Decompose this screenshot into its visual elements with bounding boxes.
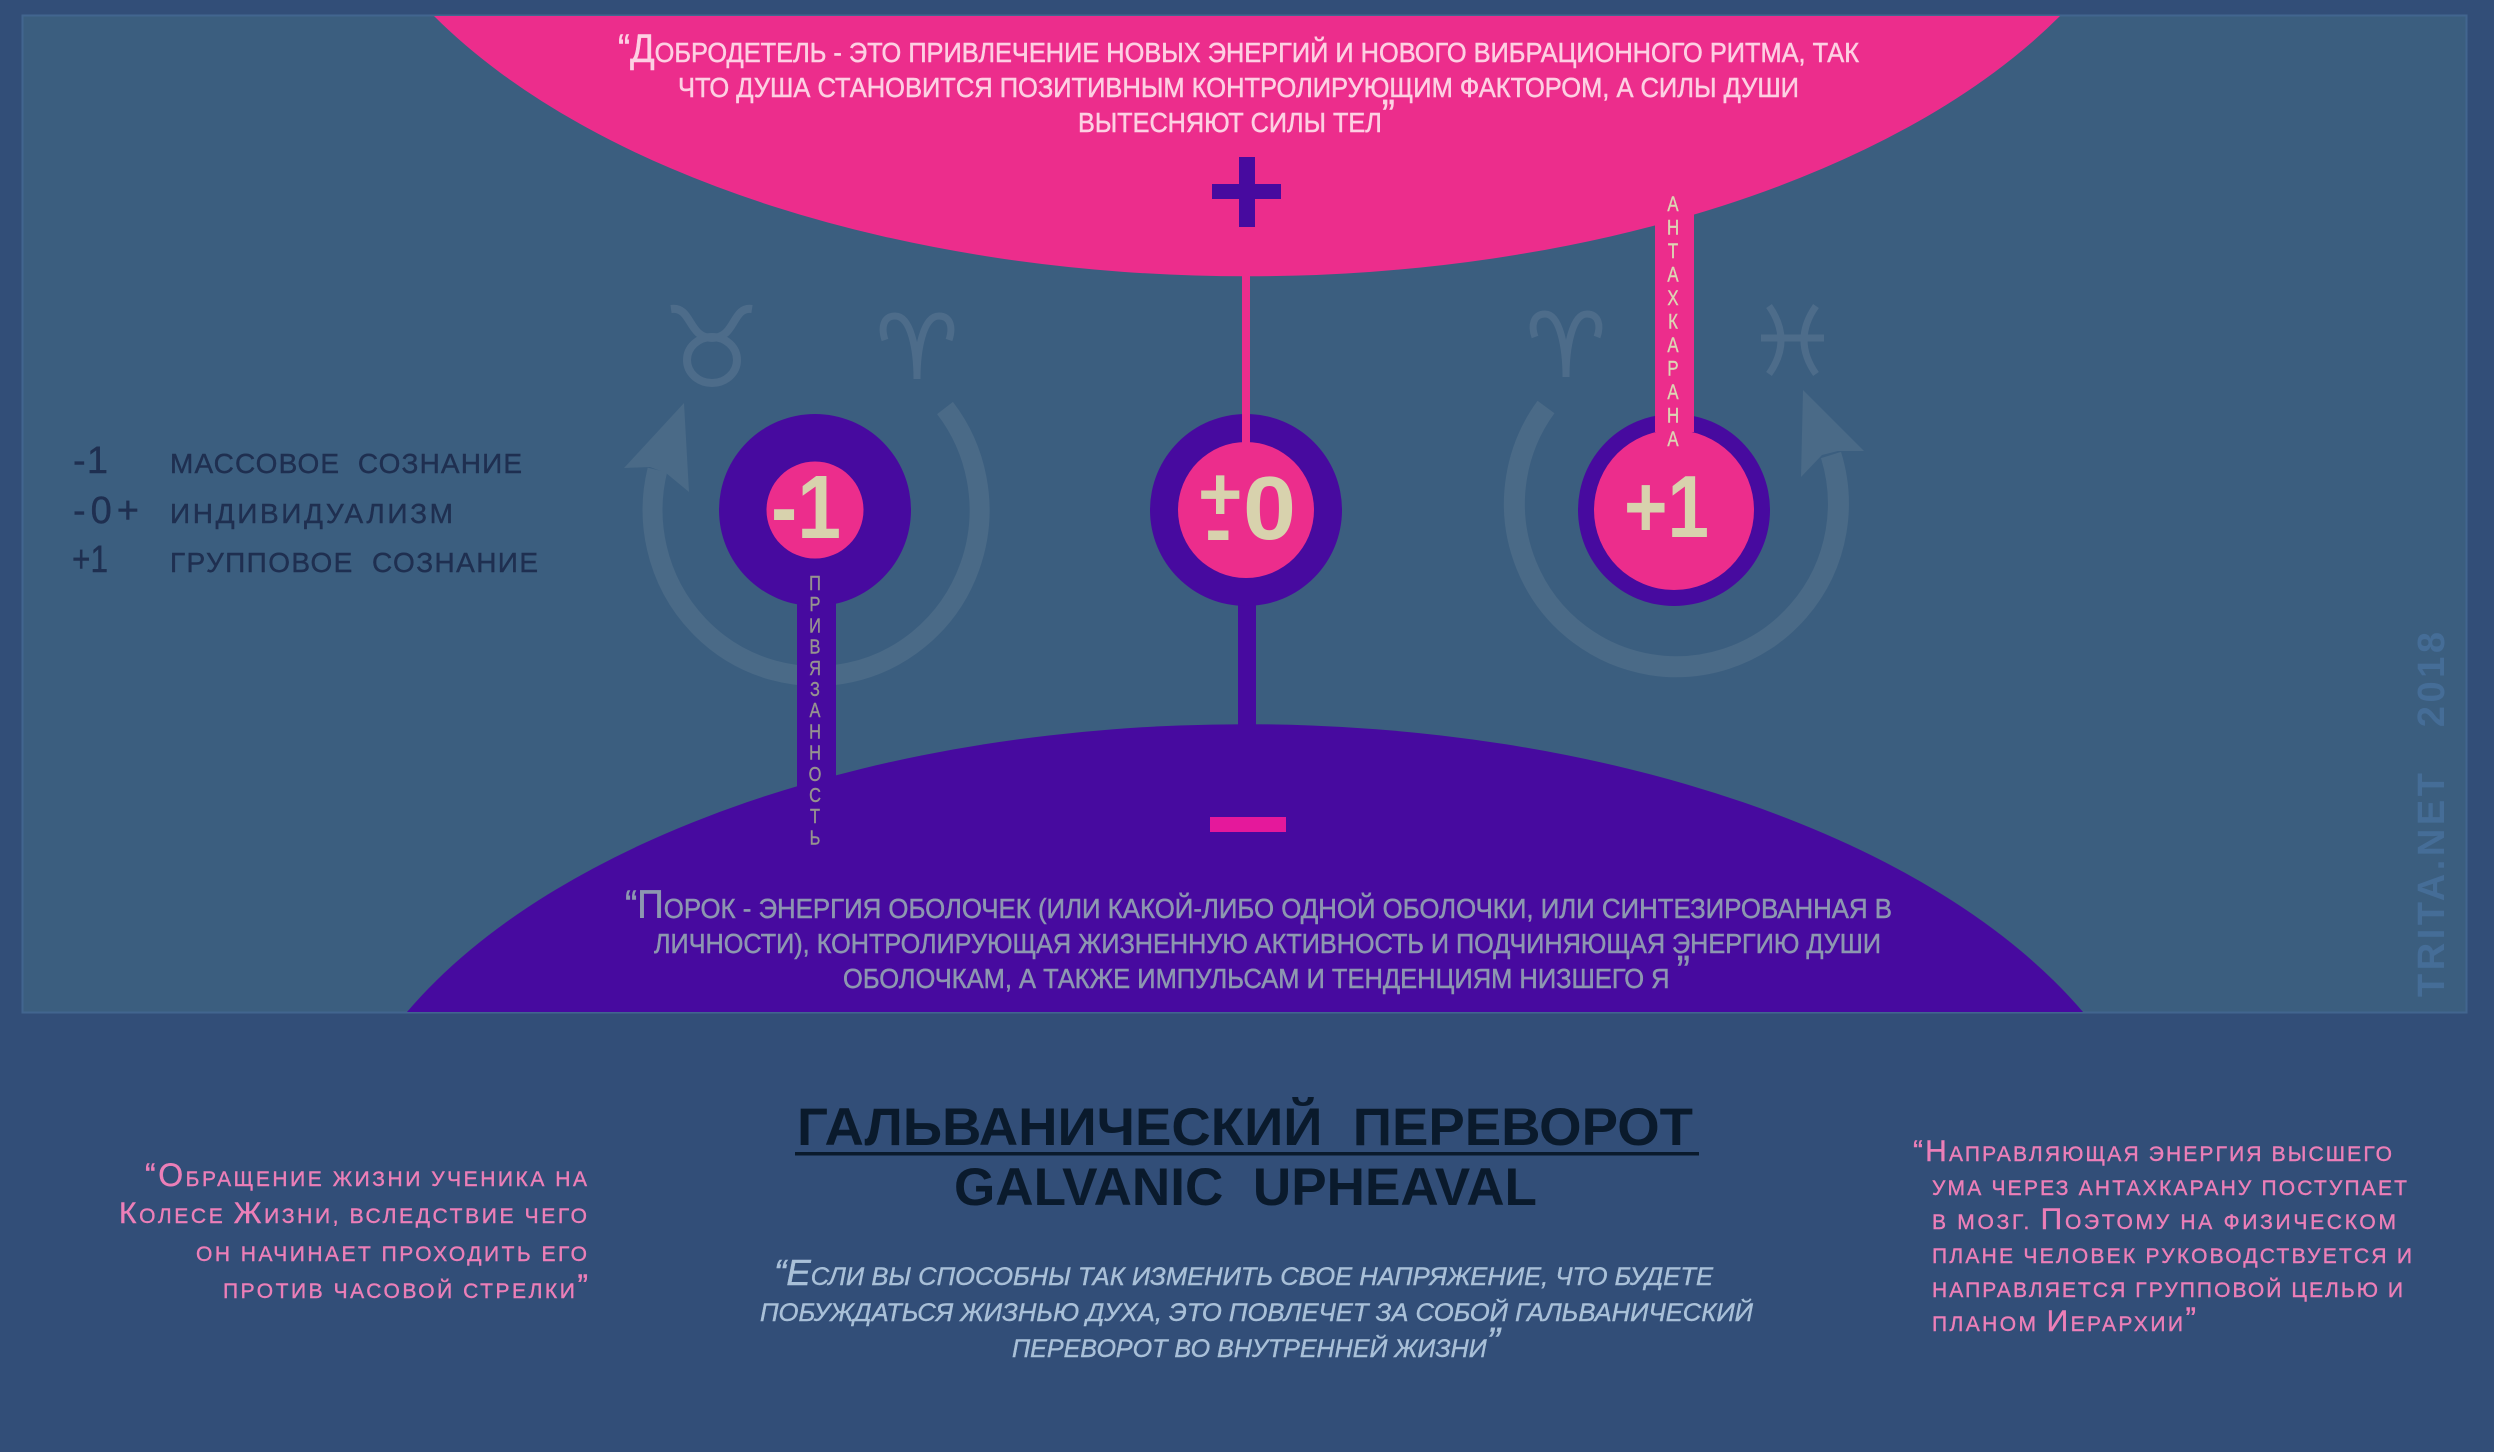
quote: right: “НАПРАВЛЯЮЩАЯ ЭНЕРГИЯ ВЫСШЕГО — [1913, 1135, 2392, 1168]
quote: center: ПОБУЖДАТЬСЯ ЖИЗНЬЮ ДУХА, ЭТО ПОВЛЕЧЕТ ЗА СОБОЙ ГАЛЬВАНИЧЕСКИЙ — [760, 1297, 1753, 1327]
legend — [72, 440, 538, 581]
icon: minus — [1210, 817, 1286, 832]
quote: center: ” — [1487, 1320, 1502, 1364]
quote: vice: ЛИЧНОСТИ), КОНТРОЛИРУЮЩАЯ ЖИЗНЕННУЮ АКТИВНОСТЬ И ПОДЧИНЯЮЩАЯ ЭНЕРГИЮ ДУШИ — [654, 928, 1881, 959]
quote: left: ПРОТИВ ЧАСОВОЙ СТРЕЛКИ — [223, 1280, 575, 1303]
quote: virtue: ” — [1382, 91, 1395, 140]
icon: aries sign left — [883, 316, 951, 379]
quote: virtue — [618, 27, 1860, 140]
quote: center: “ЕСЛИ ВЫ СПОСОБНЫ ТАК ИЗМЕНИТЬ СВОЕ НАПРЯЖЕНИЕ, ЧТО БУДЕТЕ — [774, 1252, 1713, 1293]
quote: center: ПЕРЕВОРОТ ВО ВНУТРЕННЕЙ ЖИЗНИ — [1012, 1335, 1486, 1363]
quote: vice: ” — [1677, 947, 1690, 996]
panel: diagram — [22, 16, 2466, 1012]
arrow: clockwise ring — [1514, 390, 1864, 667]
quote: vice: ОБОЛОЧКАМ, А ТАКЖЕ ИМПУЛЬСАМ И ТЕНДЕНЦИЯМ НИЗШЕГО Я — [843, 963, 1751, 994]
legend: -1 — [73, 440, 108, 482]
bottom purple dome — [407, 724, 2083, 1012]
node: plus-minus zero: 0 — [1243, 459, 1296, 559]
node: minus one: -1 — [771, 458, 841, 558]
quote: right — [1913, 1135, 2412, 1338]
quote: right: НАПРАВЛЯЕТСЯ ГРУППОВОЙ ЦЕЛЬЮ И — [1932, 1278, 2403, 1302]
node: minus one — [719, 414, 911, 795]
legend: ИНДИВИДУАЛИЗМ — [170, 498, 453, 529]
quote: left: “ОБРАЩЕНИЕ ЖИЗНИ УЧЕНИКА НА — [145, 1157, 587, 1193]
quote: right: ПЛАНОМ ИЕРАРХИИ — [1932, 1305, 2183, 1338]
vertical label: antahkarana: АНТАХКАРАНА — [1667, 193, 1679, 452]
title: ГАЛЬВАНИЧЕСКИЙ ПЕРЕВОРОТ — [797, 1096, 1693, 1157]
icon: plus — [1212, 157, 1281, 227]
watermark: TRITA.NET 2018 — [2411, 632, 2453, 997]
legend: МАССОВОЕ СОЗНАНИЕ — [170, 448, 522, 479]
quote: right: В МОЗГ. ПОЭТОМУ НА ФИЗИЧЕСКОМ — [1932, 1203, 2396, 1236]
legend: ГРУППОВОЕ СОЗНАНИЕ — [170, 547, 538, 578]
title — [795, 1096, 1699, 1217]
node: plus-minus zero: + — [1198, 452, 1242, 537]
legend: -0+ — [73, 490, 139, 532]
top pink dome — [434, 16, 2060, 276]
quote: vice — [625, 883, 1892, 996]
quote: right: ПЛАНЕ ЧЕЛОВЕК РУКОВОДСТВУЕТСЯ И — [1932, 1245, 2412, 1268]
quote: left: КОЛЕСЕ ЖИЗНИ, ВСЛЕДСТВИЕ ЧЕГО — [119, 1197, 587, 1230]
quote: right: ” — [2185, 1301, 2196, 1337]
node: plus one — [1578, 190, 1770, 606]
legend: +1 — [72, 539, 108, 581]
quote: virtue: ЧТО ДУША СТАНОВИТСЯ ПОЗИТИВНЫМ КОНТРОЛИРУЮЩИМ ФАКТОРОМ, А СИЛЫ ДУШИ — [678, 72, 1799, 103]
quote: left: ” — [577, 1268, 588, 1304]
icon: aries sign right — [1533, 314, 1599, 377]
title: GALVANIC UPHEAVAL — [954, 1158, 1537, 1217]
quote: right: УМА ЧЕРЕЗ АНТАХКАРАНУ ПОСТУПАЕТ — [1932, 1177, 2407, 1200]
node: plus-minus zero — [1150, 270, 1342, 730]
quote: left — [119, 1157, 588, 1304]
arrow: counterclockwise ring — [624, 403, 980, 676]
node: plus one: +1 — [1624, 457, 1709, 556]
node: plus-minus zero: - — [1205, 484, 1232, 573]
quote: virtue: ВЫТЕСНЯЮТ СИЛЫ ТЕЛ — [1078, 107, 1415, 138]
icon: taurus sign — [671, 309, 752, 383]
quote: vice: “ПОРОК - ЭНЕРГИЯ ОБОЛОЧЕК (ИЛИ КАКОЙ-ЛИБО ОДНОЙ ОБОЛОЧКИ, ИЛИ СИНТЕЗИРОВАННАЯ В — [625, 883, 1892, 927]
vertical label: attachment: ПРИВЯЗАННОСТЬ — [809, 571, 821, 849]
quote: center — [760, 1252, 1753, 1364]
quote: left: ОН НАЧИНАЕТ ПРОХОДИТЬ ЕГО — [196, 1243, 587, 1266]
quote: virtue: “ДОБРОДЕТЕЛЬ - ЭТО ПРИВЛЕЧЕНИЕ НОВЫХ ЭНЕРГИЙ И НОВОГО ВИБРАЦИОННОГО РИТМА, ТАК — [618, 27, 1860, 71]
icon: pisces sign — [1761, 306, 1824, 374]
